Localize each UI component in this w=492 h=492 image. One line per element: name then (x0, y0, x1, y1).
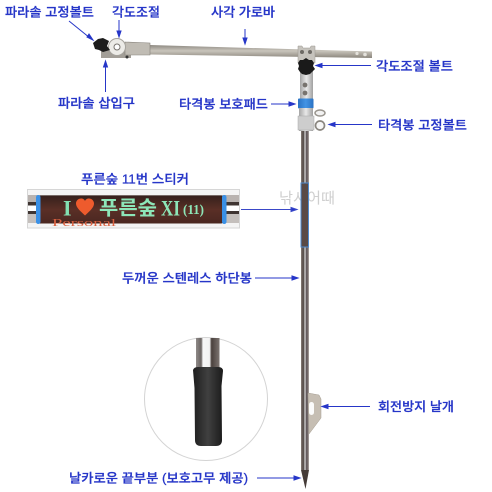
label: lower rod: 두꺼운 스텐레스 하단봉 (122, 272, 252, 286)
label: crossbar: 사각 가로바 (211, 6, 276, 20)
sticker close-up: 푸른숲 (99, 198, 157, 220)
blue striking pad (298, 98, 314, 108)
arrow: sticker to rod (241, 208, 297, 212)
arrow: protective pad (271, 102, 295, 106)
arrow: crossbar (243, 29, 247, 44)
label: fin: 회전방지 날개 (378, 400, 454, 414)
sticker close-up: Personal (52, 217, 116, 229)
anti-rotation fin (308, 393, 321, 434)
magnified circle with rubber tip (144, 338, 268, 460)
arrow: angle bolt (316, 64, 371, 68)
sticker close-up: (11) (183, 203, 204, 218)
arrow: parasol fixing bolt (69, 21, 93, 40)
label: parasol socket: 파라솔 삽입구 (58, 96, 135, 110)
rods (301, 130, 309, 489)
label: sticker: 푸른숲 11번 스티커 (81, 172, 189, 186)
label: angle bolt: 각도조절 볼트 (376, 60, 453, 74)
angle adjusting knob (298, 58, 315, 75)
label: protective pad: 타격봉 보호패드 (179, 98, 268, 112)
label: fixing bolt: 타격봉 고정볼트 (378, 118, 467, 132)
arrow: fin (322, 404, 370, 408)
square crossbar (150, 45, 372, 58)
arrow: angle adjust (117, 20, 121, 37)
vertical head with bolt holes (300, 63, 313, 99)
sticker close-up: XI (161, 196, 180, 220)
label: angle adjust: 각도조절 (112, 6, 160, 20)
arrow: parasol socket (104, 61, 108, 92)
parasol clamp assembly (93, 38, 150, 58)
sticker on rod (301, 183, 308, 247)
watermark: 낚시어때 (279, 190, 335, 207)
arrow: tip (257, 476, 300, 480)
sticker close-up: I (63, 196, 72, 220)
sticker close-up (28, 190, 240, 229)
label: parasol fixing bolt: 파라솔 고정볼트 (5, 6, 94, 20)
arrow: lower rod (255, 276, 298, 280)
label: tip: 날카로운 끝부분 (보호고무 제공) (69, 472, 248, 486)
arrow: fixing bolt (329, 122, 372, 126)
T-clamp block (298, 46, 367, 63)
collar with wing bolts (298, 108, 325, 131)
